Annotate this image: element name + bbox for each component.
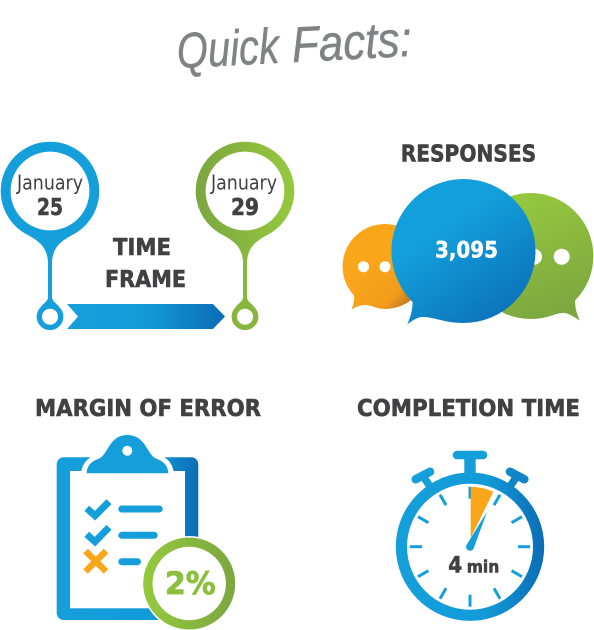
orange time wedge xyxy=(471,487,493,538)
panel: completion time xyxy=(357,396,580,621)
pin: start date: 25 xyxy=(37,195,63,221)
clock hand xyxy=(466,512,487,551)
heading: completion time: COMPLETION TIME xyxy=(357,396,580,422)
panel: margin of error xyxy=(35,396,261,630)
check marks xyxy=(87,502,109,542)
heading: time frame: TIME xyxy=(113,235,171,261)
arrow: timeline xyxy=(67,304,225,329)
time label xyxy=(448,554,499,579)
title xyxy=(175,11,413,79)
clock ticks xyxy=(410,487,530,607)
time label: min xyxy=(467,558,499,578)
cross mark xyxy=(86,551,106,572)
badge: 2 percent: 2% xyxy=(165,566,216,602)
heading: time frame: FRAME xyxy=(105,267,186,293)
pin: start date xyxy=(1,142,99,330)
pin: end date: January xyxy=(209,170,277,194)
icon: orange speech bubble xyxy=(343,224,428,309)
heading: responses: RESPONSES xyxy=(401,142,536,168)
title: Facts: xyxy=(290,11,413,73)
badge: 2 percent xyxy=(142,536,237,630)
panel: responses xyxy=(343,142,593,324)
icon: clipboard xyxy=(57,430,198,620)
heading: time frame xyxy=(105,235,186,293)
pin: start date: January xyxy=(15,170,83,194)
panel: time frame xyxy=(1,142,294,330)
icon: blue speech bubble xyxy=(391,179,536,324)
checklist lines xyxy=(122,509,159,562)
time label: 4 xyxy=(448,554,462,579)
title: Quick xyxy=(175,18,283,79)
icon: blue speech bubble: 3,095 xyxy=(435,238,498,263)
icon: stopwatch xyxy=(396,451,544,621)
icon: green speech bubble xyxy=(468,193,593,321)
pin: end date xyxy=(196,142,294,330)
pin: end date: 29 xyxy=(231,195,259,221)
heading: margin of error: MARGIN OF ERROR xyxy=(35,396,261,422)
